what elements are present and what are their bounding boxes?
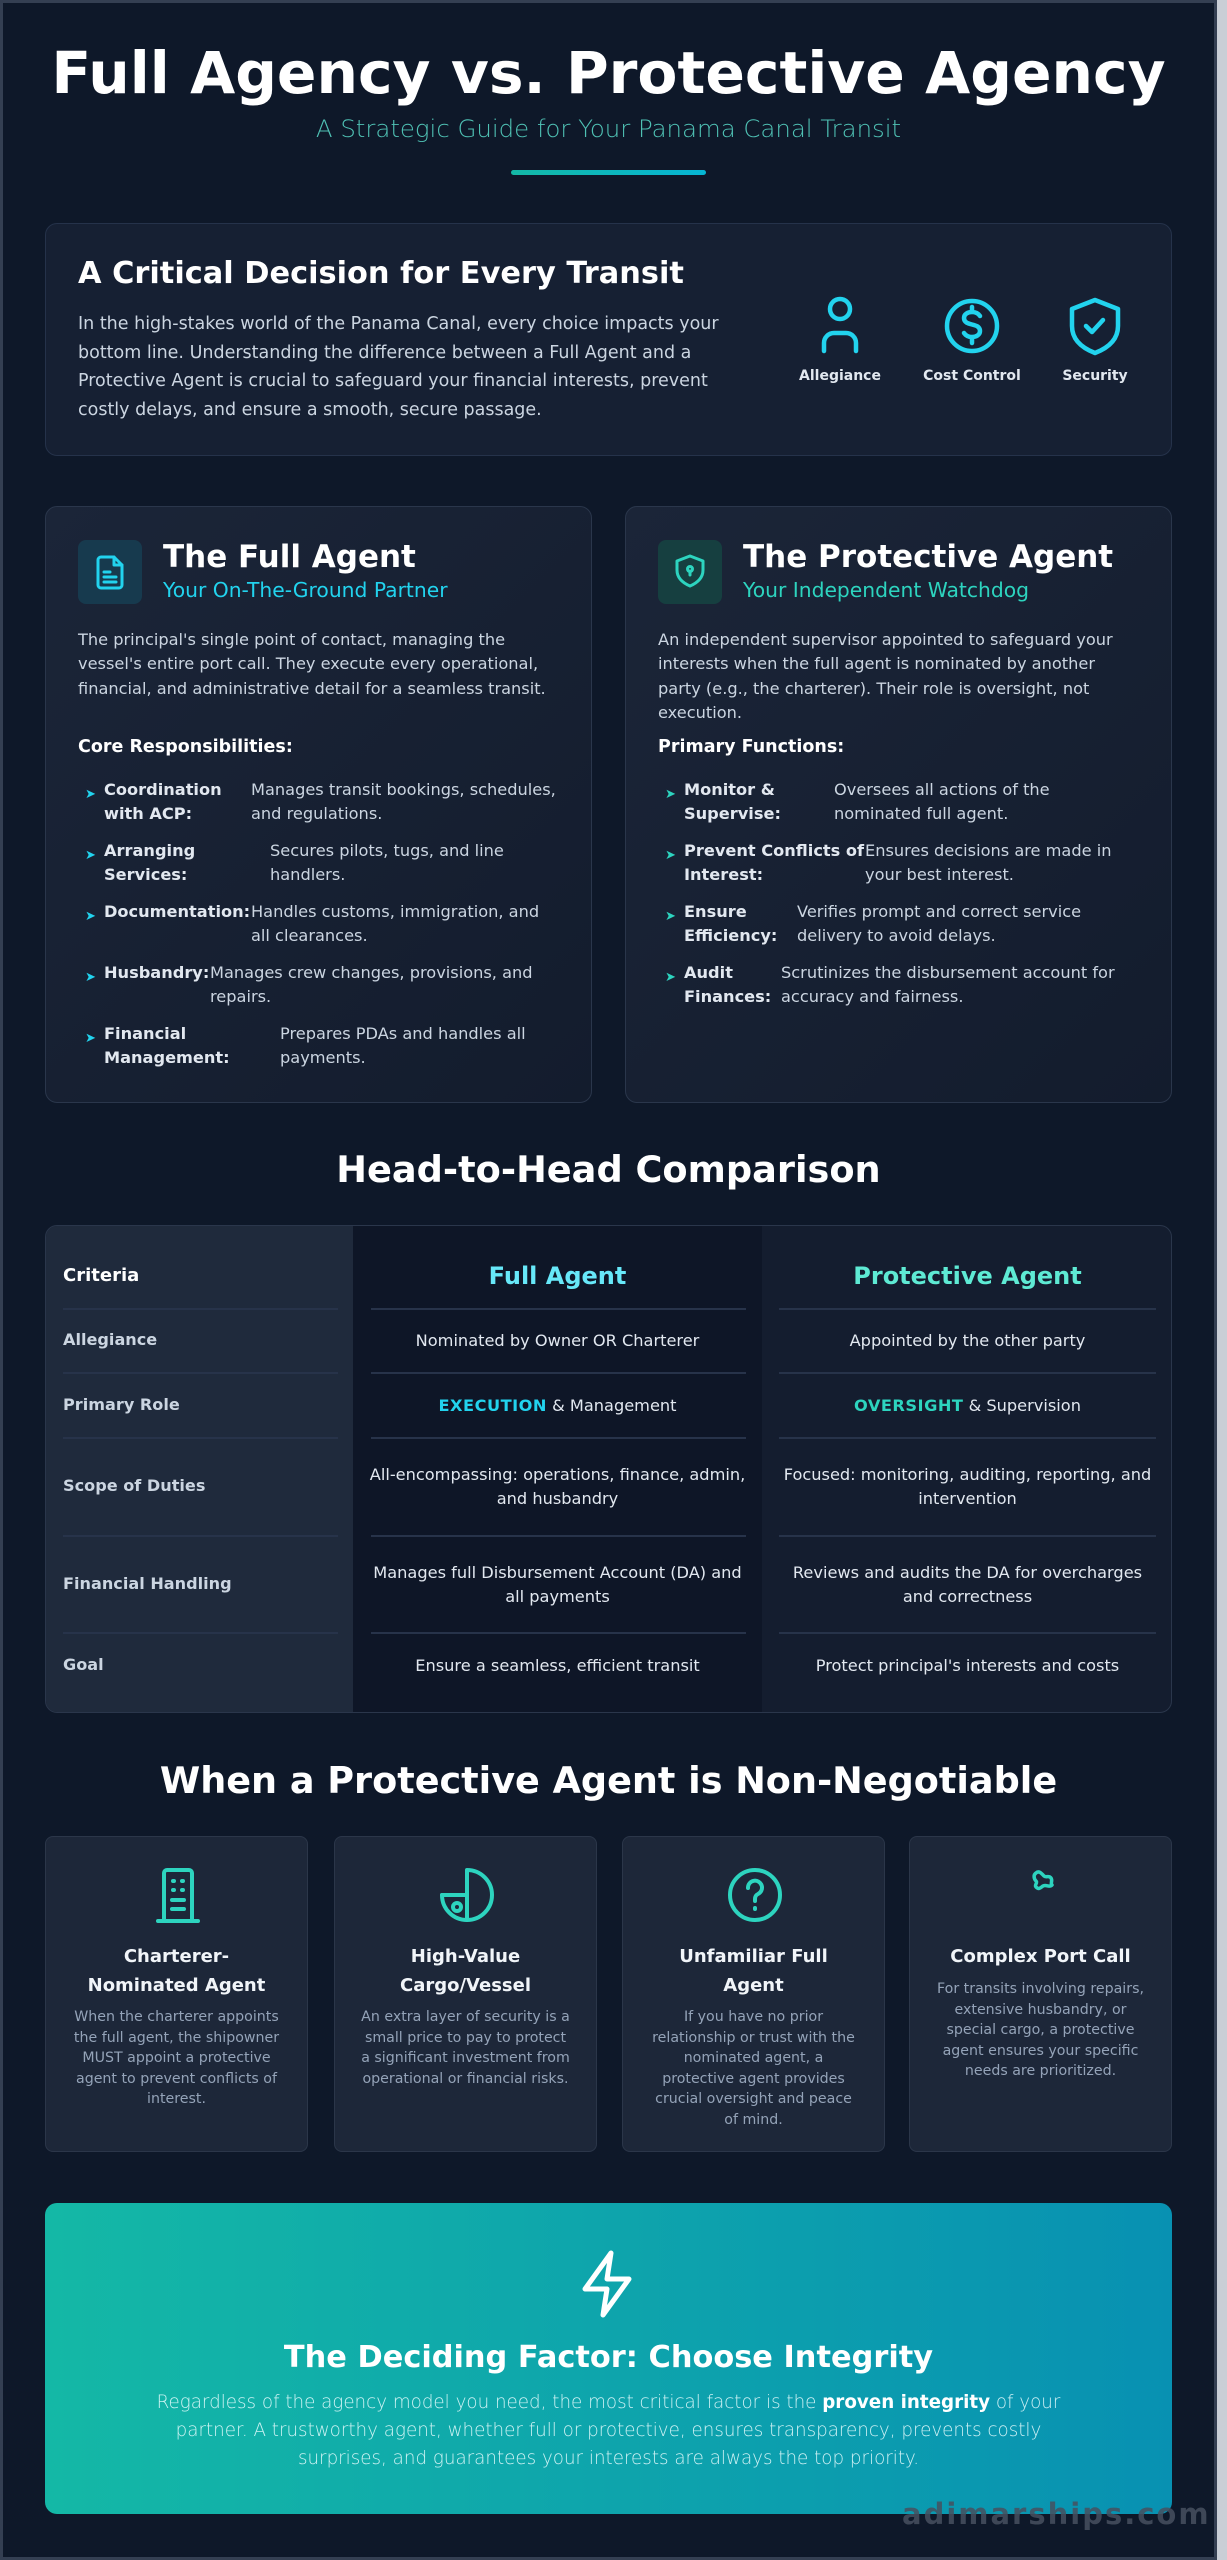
text: needs are prioritized.	[965, 2063, 1116, 2079]
icon: cost control	[923, 298, 1021, 384]
intro text	[78, 314, 719, 420]
icon: shield lock	[658, 540, 722, 604]
comparison table: Appointed by the other party	[850, 1331, 1085, 1350]
comparison table: EXECUTION & Management	[438, 1396, 677, 1415]
icon: building	[156, 1868, 200, 1923]
list: functions: Oversees all actions of the	[834, 780, 1050, 799]
list: responsibilities: Manages crew changes, provisions, and	[210, 963, 533, 982]
intro heading: A Critical Decision for Every Transit	[78, 256, 684, 291]
text	[361, 2009, 570, 2086]
icon: security	[1062, 298, 1128, 384]
title: Full Agency vs. Protective Agency	[51, 39, 1166, 107]
list: responsibilities: Prepares PDAs and handles all	[280, 1024, 526, 1043]
subtitle: A Strategic Guide for Your Panama Canal Transit	[316, 114, 901, 143]
list: responsibilities: Husbandry:	[104, 963, 209, 982]
list: functions: Prevent Conflicts of	[684, 841, 864, 860]
text: a significant investment from	[361, 2050, 570, 2066]
list: responsibilities: handlers.	[270, 865, 345, 884]
text: of mind.	[724, 2112, 783, 2128]
list: functions: Scrutinizes the disbursement account for	[781, 963, 1115, 982]
description: execution.	[658, 703, 742, 722]
comparison table: Ensure a seamless, efficient transit	[415, 1656, 700, 1675]
description	[658, 630, 1113, 722]
text: agent to prevent conflicts of	[76, 2070, 277, 2086]
heading: comparison: Head-to-Head Comparison	[336, 1148, 881, 1191]
text	[937, 1981, 1144, 2079]
panel: full agent: ➤	[85, 787, 96, 802]
list: functions: accuracy and fairness.	[781, 987, 964, 1006]
list heading: Primary Functions:	[658, 737, 844, 757]
icon: pie chart	[440, 1868, 494, 1922]
panel: protective agent: ➤	[665, 848, 676, 863]
list: responsibilities	[85, 780, 556, 1067]
heading: The Protective Agent	[743, 539, 1113, 575]
list: functions: delivery to avoid delays.	[797, 926, 996, 945]
intro text: bottom line. Understanding the difference between a Full Agent and a	[78, 342, 691, 362]
title	[88, 1946, 265, 1996]
callout text	[157, 2392, 1060, 2469]
panel: full agent: ➤	[85, 848, 96, 863]
subheading: Your Independent Watchdog	[743, 578, 1029, 602]
callout text: surprises, and guarantees your interests are always the top priority.	[298, 2448, 919, 2469]
comparison table: and correctness	[903, 1587, 1032, 1606]
list: responsibilities: Secures pilots, tugs, and line	[270, 841, 504, 860]
card: charterer-nominated	[45, 1836, 308, 2152]
card: high-value	[334, 1836, 597, 2152]
list: functions: Supervise:	[684, 804, 781, 823]
icon: question	[728, 1868, 782, 1922]
text: extensive husbandry, or	[955, 2002, 1126, 2018]
panel: protective agent	[625, 506, 1172, 1103]
title: Complex Port Call	[950, 1946, 1131, 1967]
comparison table: intervention	[918, 1489, 1017, 1508]
list: responsibilities: Documentation:	[104, 902, 250, 921]
panel: full agent: ➤	[85, 909, 96, 924]
intro text: In the high-stakes world of the Panama Canal, every choice impacts your	[78, 314, 719, 334]
text: If you have no prior	[684, 2009, 823, 2025]
title	[400, 1946, 531, 1996]
text: the full agent, the shipowner	[74, 2030, 279, 2046]
callout text: Regardless of the agency model you need, the most critical factor is the proven integrity of your	[157, 2392, 1060, 2413]
text: protective agent provides	[662, 2070, 845, 2086]
list: responsibilities: all clearances.	[251, 926, 368, 945]
panel: full agent: ➤	[85, 970, 96, 985]
title: High-Value	[411, 1946, 520, 1967]
text: relationship or trust with the	[652, 2030, 855, 2046]
panel: protective agent: ➤	[665, 970, 676, 985]
card: complex port call	[909, 1836, 1172, 2152]
comparison table: OVERSIGHT & Supervision	[854, 1396, 1081, 1415]
list: responsibilities: Arranging	[104, 841, 195, 860]
title	[679, 1946, 828, 1996]
label: Cost Control	[923, 368, 1021, 384]
description: An independent supervisor appointed to safeguard your	[658, 630, 1113, 649]
text: When the charterer appoints	[74, 2009, 279, 2025]
comparison table: and husbandry	[497, 1489, 618, 1508]
panel: intro	[45, 223, 1172, 456]
list: responsibilities: payments.	[280, 1048, 366, 1067]
text: nominated agent, a	[684, 2050, 823, 2066]
text: small price to pay to protect	[365, 2030, 566, 2046]
text: An extra layer of security is a	[361, 2009, 570, 2025]
intro text: Protective Agent is crucial to safeguard your financial interests, prevent	[78, 371, 708, 391]
list: functions: nominated full agent.	[834, 804, 1008, 823]
icon: allegiance	[799, 296, 881, 384]
header: full agent: Full Agent	[489, 1262, 626, 1290]
list: functions: Interest:	[684, 865, 763, 884]
list: functions: Efficiency:	[684, 926, 777, 945]
intro text: costly delays, and ensure a smooth, secure passage.	[78, 400, 542, 420]
text: special cargo, a protective	[947, 2022, 1134, 2038]
list: functions: your best interest.	[865, 865, 1014, 884]
text: For transits involving repairs,	[937, 1981, 1144, 1997]
list: functions: Ensures decisions are made in	[865, 841, 1111, 860]
list: functions: Monitor &	[684, 780, 775, 799]
description: The principal's single point of contact, managing the	[78, 630, 505, 649]
title: Nominated Agent	[88, 1975, 265, 1996]
subheading: Your On-The-Ground Partner	[163, 578, 448, 602]
header: protective agent: Protective Agent	[853, 1262, 1082, 1290]
row: financial: Financial Handling	[63, 1574, 232, 1593]
title: Unfamiliar Full	[679, 1946, 828, 1967]
callout heading: The Deciding Factor: Choose Integrity	[284, 2340, 933, 2375]
icon: lightning bolt	[582, 2250, 632, 2318]
text: MUST appoint a protective	[82, 2050, 271, 2066]
description: party (e.g., the charterer). Their role is oversight, not	[658, 679, 1089, 698]
list: functions: Verifies prompt and correct service	[797, 902, 1081, 921]
comparison table: Protect principal's interests and costs	[816, 1656, 1119, 1675]
list: functions: Ensure	[684, 902, 747, 921]
list: responsibilities: Coordination	[104, 780, 222, 799]
list: responsibilities: with ACP:	[104, 804, 192, 823]
label: Allegiance	[799, 368, 881, 384]
list: responsibilities: Handles customs, immigration, and	[251, 902, 539, 921]
list heading: Core Responsibilities:	[78, 737, 293, 757]
title: Agent	[723, 1975, 784, 1996]
row: goal: Goal	[63, 1655, 104, 1674]
text: operational or financial risks.	[362, 2070, 569, 2086]
list: responsibilities: and regulations.	[251, 804, 382, 823]
text	[652, 2009, 855, 2128]
title: Cargo/Vessel	[400, 1975, 531, 1996]
comparison table: All-encompassing: operations, finance, admin,	[370, 1465, 745, 1484]
list: functions: Audit	[684, 963, 733, 982]
description: interests when the full agent is nominated by another	[658, 654, 1095, 673]
comparison table: Manages full Disbursement Account (DA) and	[373, 1563, 742, 1582]
text: agent ensures your specific	[943, 2042, 1138, 2058]
heading: non-negotiable: When a Protective Agent is Non-Negotiable	[160, 1759, 1057, 1802]
card: unfamiliar	[622, 1836, 885, 2152]
text	[74, 2009, 280, 2107]
accent bar	[511, 170, 706, 175]
comparison table: Reviews and audits the DA for overcharges	[793, 1563, 1142, 1582]
row: allegiance: Allegiance	[63, 1330, 157, 1349]
description	[78, 630, 546, 698]
heading: The Full Agent	[163, 539, 416, 575]
panel: protective agent: ➤	[665, 909, 676, 924]
comparison table: Focused: monitoring, auditing, reporting, and	[784, 1465, 1151, 1484]
header: criteria: Criteria	[63, 1265, 139, 1286]
text: interest.	[147, 2091, 206, 2107]
description: financial, and administrative detail for a seamless transit.	[78, 679, 546, 698]
description: vessel's entire port call. They execute every operational,	[78, 654, 538, 673]
panel: protective agent: ➤	[665, 787, 676, 802]
comparison table	[45, 1225, 1172, 1713]
list: responsibilities: repairs.	[210, 987, 271, 1006]
panel: full agent: ➤	[85, 1031, 96, 1046]
panel: full agent	[45, 506, 592, 1103]
list: functions	[665, 780, 1115, 1006]
list: responsibilities: Management:	[104, 1048, 230, 1067]
callout: deciding factor	[45, 2203, 1172, 2514]
comparison table: all payments	[505, 1587, 610, 1606]
text: crucial oversight and peace	[655, 2091, 852, 2107]
row: primary role: Primary Role	[63, 1395, 180, 1414]
list: responsibilities: Financial	[104, 1024, 186, 1043]
list: functions: Finances:	[684, 987, 771, 1006]
callout text: partner. A trustworthy agent, whether full or protective, ensures transparency, prevents costly	[176, 2420, 1041, 2441]
title: Charterer-	[124, 1946, 229, 1967]
label: Security	[1062, 368, 1128, 384]
list: responsibilities: Services:	[104, 865, 187, 884]
comparison table: Nominated by Owner OR Charterer	[416, 1331, 699, 1350]
list: responsibilities: Manages transit bookings, schedules,	[251, 780, 556, 799]
icon: document	[78, 540, 142, 604]
row: scope: Scope of Duties	[63, 1476, 205, 1495]
watermark: adimarships.com	[902, 2497, 1211, 2531]
icon: squiggle	[1032, 1870, 1054, 1890]
